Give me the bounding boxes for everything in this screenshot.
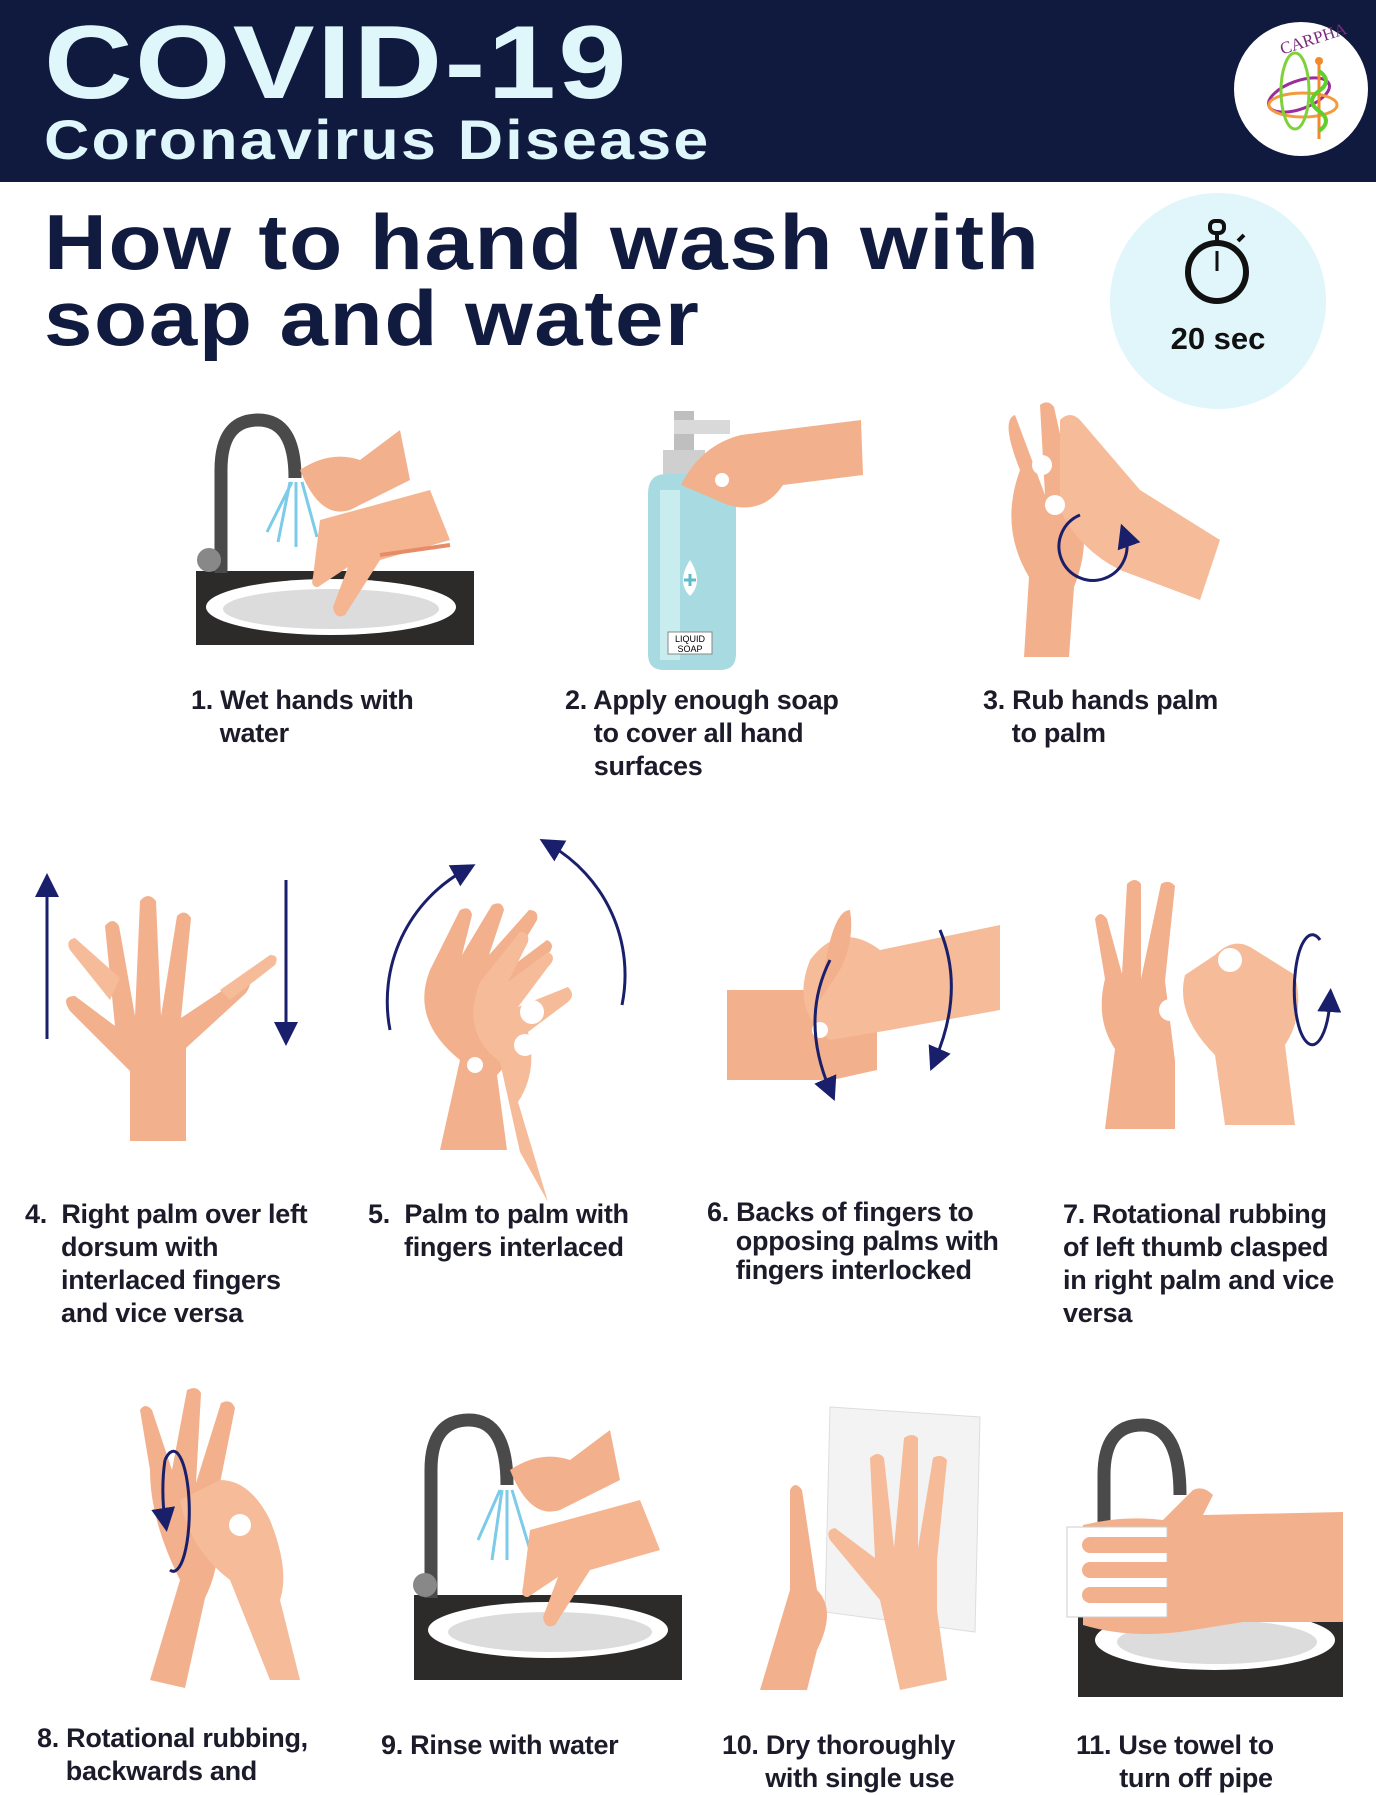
timer badge [1110,193,1326,409]
label: step 7: versa [1063,1298,1132,1328]
icon: step 6 backs of fingers [727,910,1000,1090]
label: step 6 [707,1197,999,1285]
label: step 3 [983,685,1218,748]
label: step 6: fingers interlocked [736,1255,972,1285]
icon: step 5 fingers interlaced [387,845,625,1202]
main heading: soap and water [44,274,701,362]
label: step 2: surfaces [594,751,702,781]
icon: step 1 wet hands [196,420,474,645]
icon: step 2 soap bottle [648,411,863,670]
icon: step 7 thumb rubbing [1095,880,1330,1129]
label: step 8 [37,1723,308,1786]
icon: step 4 palm over dorsum [47,880,286,1141]
label: step 1: water [220,718,289,748]
label: step 4: and vice versa [61,1298,243,1328]
icon: step 11 towel turn off [1067,1425,1343,1697]
icon: step 2 soap bottle: LIQUID [675,634,705,644]
icon: step 2 soap bottle: SOAP [677,644,703,654]
label: step 4: interlaced fingers [61,1265,281,1295]
label: step 7: of left thumb clasped [1063,1232,1328,1262]
icon: step 3 palm to palm [1009,402,1220,657]
label: step 6: 6. Backs of fingers to [707,1197,973,1227]
icon: step 10 dry hands [760,1407,980,1690]
label: step 5: 5. Palm to palm with [368,1199,629,1229]
label: step 1 [191,685,413,748]
label: step 4: 4. Right palm over left [25,1199,307,1229]
main heading: How to hand wash with [44,198,1041,286]
label: step 5 [368,1199,629,1262]
label: step 6: opposing palms with [736,1226,999,1256]
label: step 8: 8. Rotational rubbing, [37,1723,308,1753]
icon: step 8 fingertips rotation [132,1388,300,1688]
label: step 9: 9. Rinse with water [381,1730,618,1760]
label: step 10: with single use [765,1763,954,1793]
label: step 11 [1076,1730,1274,1793]
main heading [44,198,1041,362]
label: step 10 [722,1730,956,1793]
icon: step 9 rinse [413,1420,682,1680]
subtitle: Coronavirus Disease: Coronavirus Disease [44,108,711,171]
icon: stopwatch [1185,219,1249,304]
label: step 5: fingers interlaced [404,1232,624,1262]
header band [0,0,1376,182]
label: step 2: to cover all hand [594,718,803,748]
title: COVID-19: COVID-19 [44,5,629,121]
label: step 11: 11. Use towel to [1076,1730,1274,1760]
label: step 7 [1063,1199,1334,1328]
logo: CARPHA [1234,21,1368,156]
label: step 2: 2. Apply enough soap [565,685,839,715]
label: step 8: backwards and [66,1756,257,1786]
label: step 7: 7. Rotational rubbing [1063,1199,1327,1229]
label: step 10: 10. Dry thoroughly [722,1730,955,1760]
timer text: 20 sec [1171,321,1265,356]
label: step 11: turn off pipe [1119,1763,1273,1793]
label: step 3: 3. Rub hands palm [983,685,1218,715]
label: step 3: to palm [1012,718,1106,748]
label: step 4 [25,1199,308,1328]
label: step 2 [565,685,839,781]
label: step 7: in right palm and vice [1063,1265,1334,1295]
label: step 1: 1. Wet hands with [191,685,413,715]
label: step 4: dorsum with [61,1232,218,1262]
